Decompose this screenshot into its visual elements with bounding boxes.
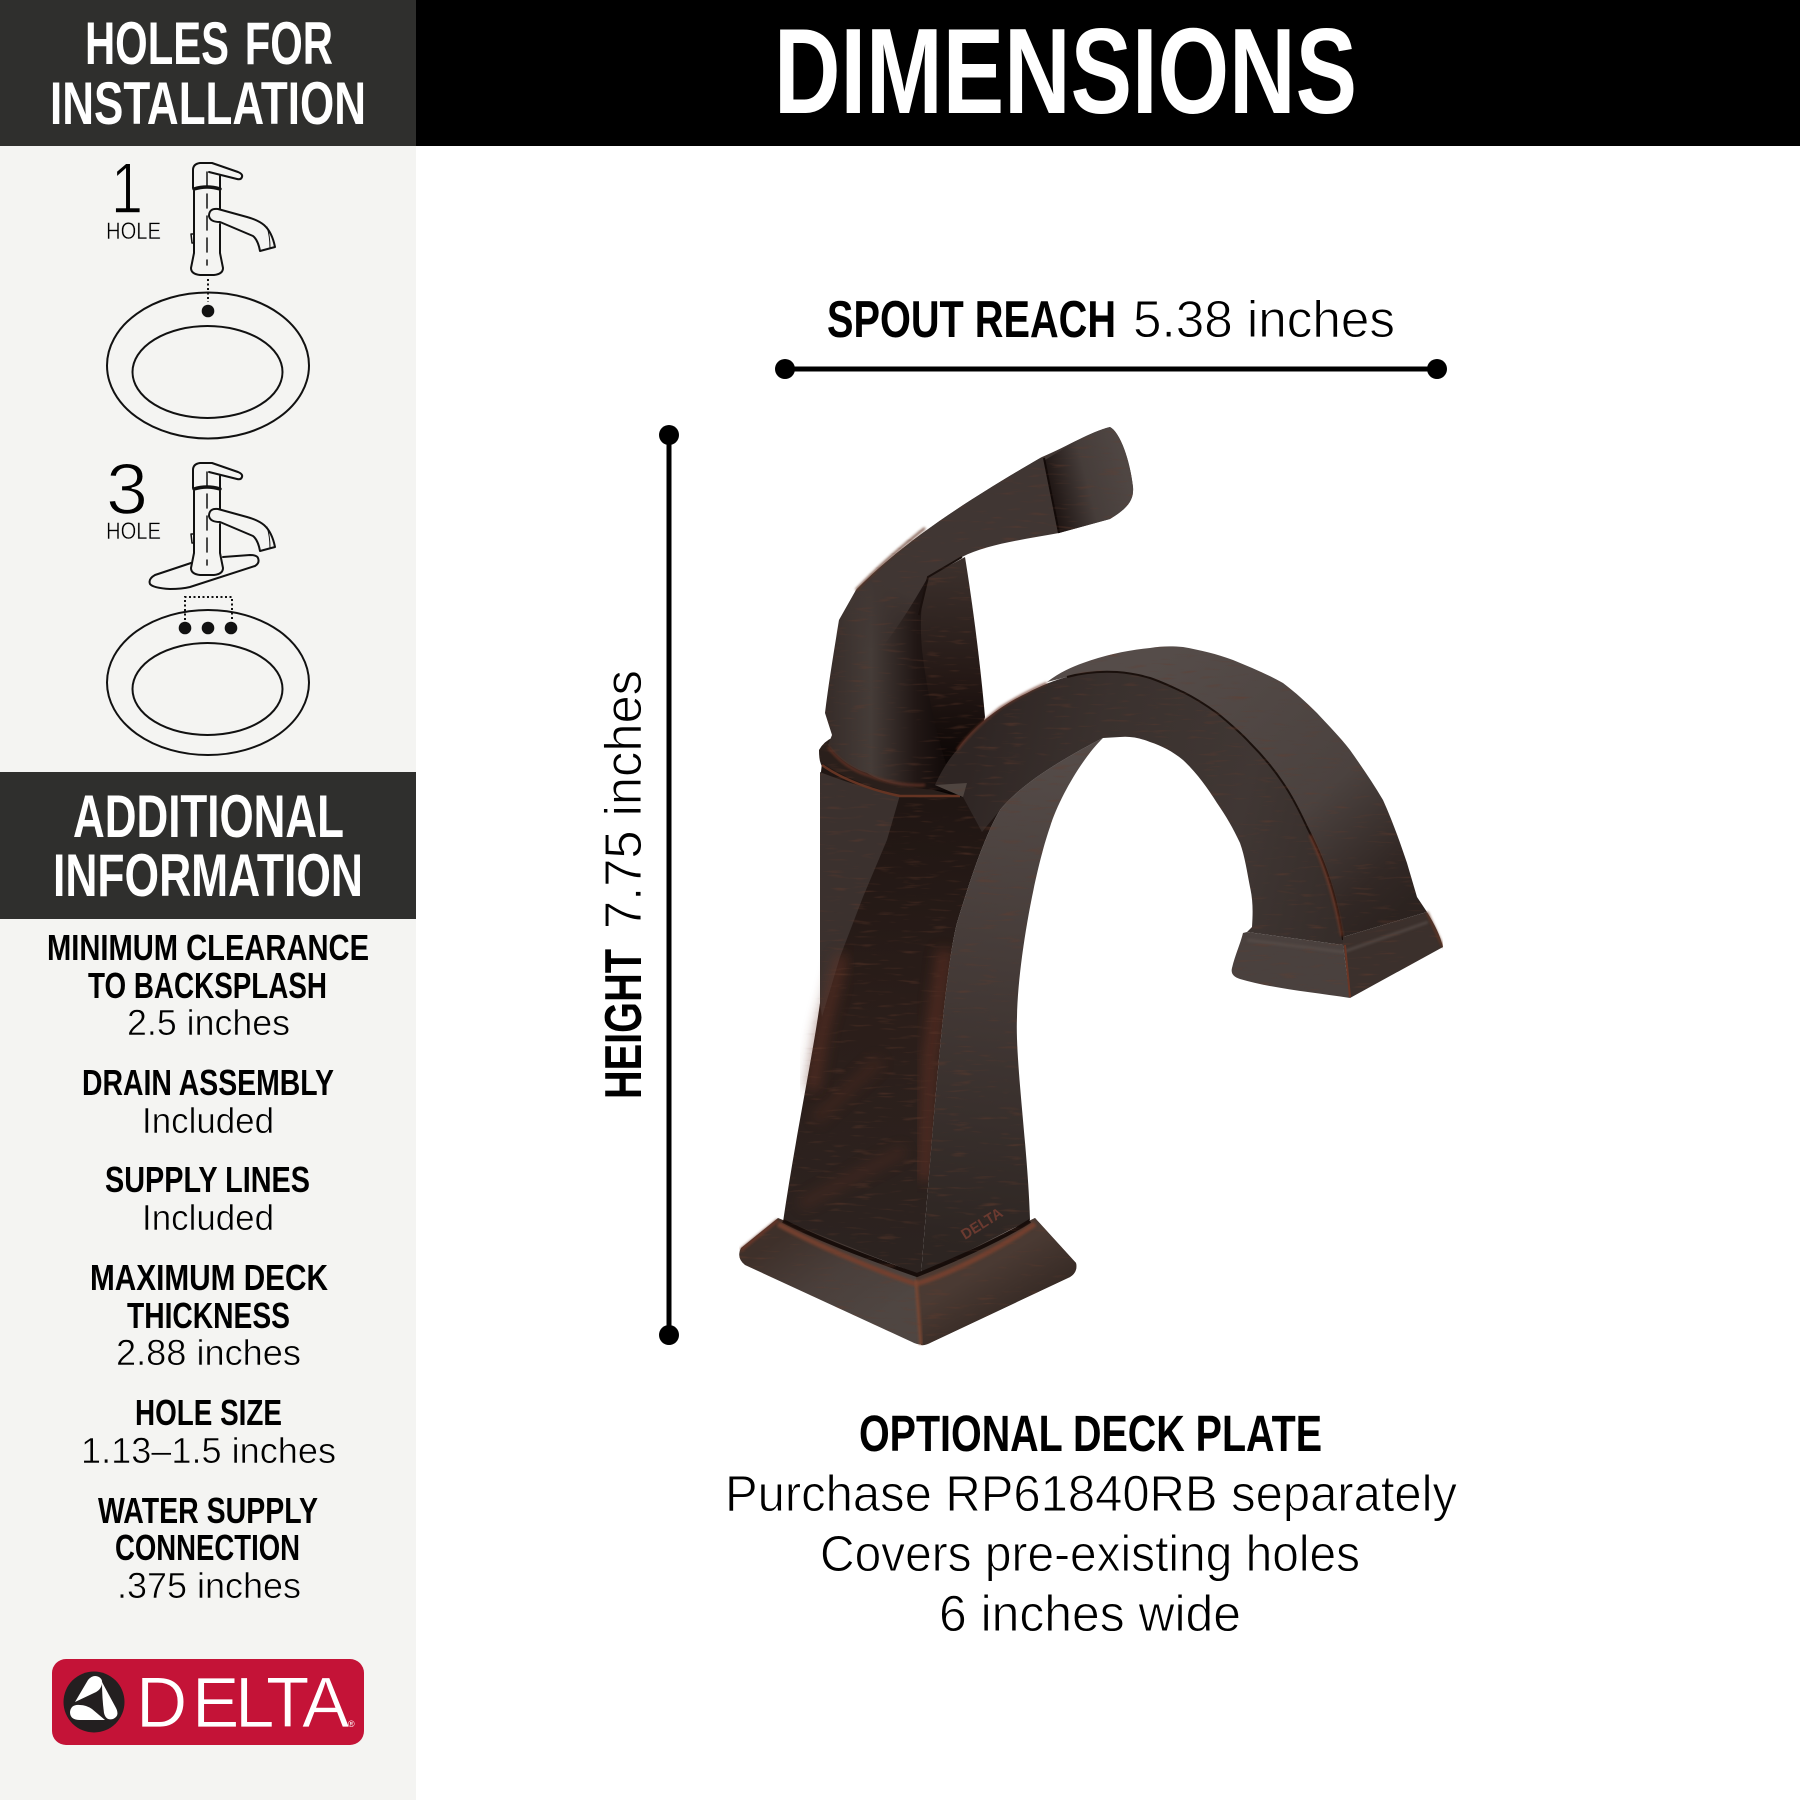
text block: optional deck plate: Covers pre-existing holes [820, 1525, 1360, 1582]
heading band: additional information [0, 772, 416, 919]
dimension: spout reach: 5.38 inches [1133, 291, 1395, 349]
icon: 3 hole installation [106, 450, 309, 755]
dimension: spout reach: SPOUT REACH [827, 291, 1116, 349]
info: drain assembly: Included [142, 1100, 274, 1141]
dimension: spout reach [775, 291, 1447, 379]
heading band: holes for installation: HOLES FOR [85, 10, 333, 77]
info: minimum clearance: MINIMUM CLEARANCE [47, 927, 369, 968]
label: 3 hole: HOLE [106, 518, 161, 545]
text block: optional deck plate: 6 inches wide [939, 1585, 1241, 1642]
info: water supply connection: CONNECTION [115, 1527, 300, 1568]
info: maximum deck thickness: THICKNESS [127, 1295, 290, 1336]
logo: Delta [52, 1659, 364, 1745]
faucet body [783, 763, 1000, 1275]
title band: dimensions: DIMENSIONS [774, 3, 1357, 139]
heading band: holes for installation [0, 0, 416, 146]
collar [819, 737, 960, 797]
spout end [1232, 912, 1443, 998]
info: minimum clearance [47, 927, 369, 1043]
logo: Delta: ® [348, 1719, 355, 1729]
info: hole size [81, 1392, 336, 1471]
icon: 1 hole installation [106, 149, 309, 438]
info: maximum deck thickness [90, 1257, 328, 1373]
info: water supply connection: .375 inches [117, 1565, 301, 1606]
faucet base [739, 1218, 1076, 1345]
info: drain assembly [82, 1062, 334, 1141]
icon: faucet with deck plate line drawing [150, 463, 275, 589]
label: 3 hole [106, 450, 161, 545]
spout near face [935, 672, 1343, 945]
dimension: height [595, 425, 679, 1345]
icon: sink with three holes [107, 597, 309, 755]
label: 1 hole: HOLE [106, 218, 161, 245]
stamped Delta mark: DELTA [958, 1205, 1006, 1243]
info: supply lines [105, 1159, 310, 1238]
spout inner leg [921, 738, 1103, 1275]
info: minimum clearance: TO BACKSPLASH [88, 965, 327, 1006]
text block: optional deck plate: Purchase RP61840RB separately [725, 1465, 1457, 1522]
text block: optional deck plate [725, 1405, 1457, 1642]
label: 3 hole: 3 [106, 450, 148, 530]
info: maximum deck thickness: MAXIMUM DECK [90, 1257, 328, 1298]
panel: left sidebar [0, 0, 416, 1800]
info: drain assembly: DRAIN ASSEMBLY [82, 1062, 334, 1103]
heading band: additional information: INFORMATION [53, 842, 363, 909]
spout ridge line [1067, 672, 1343, 940]
product image: faucet [739, 427, 1443, 1345]
dimension: height: HEIGHT [595, 949, 653, 1099]
info: hole size: HOLE SIZE [135, 1392, 282, 1433]
lever handle [825, 427, 1133, 790]
heading band: holes for installation: INSTALLATION [50, 70, 366, 137]
title band: dimensions [416, 0, 1800, 146]
text block: optional deck plate: OPTIONAL DECK PLATE [859, 1405, 1322, 1462]
spout tip highlight [935, 783, 967, 797]
heading band: additional information: ADDITIONAL [73, 783, 344, 850]
info: hole size: 1.13–1.5 inches [81, 1430, 336, 1471]
icon: faucet line drawing [191, 163, 275, 275]
info: supply lines: SUPPLY LINES [105, 1159, 310, 1200]
dimension: height: 7.75 inches [595, 670, 653, 929]
info: maximum deck thickness: 2.88 inches [116, 1332, 301, 1373]
spout far face [1047, 646, 1427, 937]
info: supply lines: Included [142, 1197, 274, 1238]
info: minimum clearance: 2.5 inches [127, 1002, 290, 1043]
logo: Delta: DELTA [136, 1664, 350, 1743]
label: 1 hole [106, 149, 161, 245]
info: water supply connection [98, 1490, 318, 1606]
info: water supply connection: WATER SUPPLY [98, 1490, 318, 1531]
label: 1 hole: 1 [111, 149, 143, 229]
icon: sink with one hole [107, 279, 309, 438]
handle neck [880, 557, 985, 797]
